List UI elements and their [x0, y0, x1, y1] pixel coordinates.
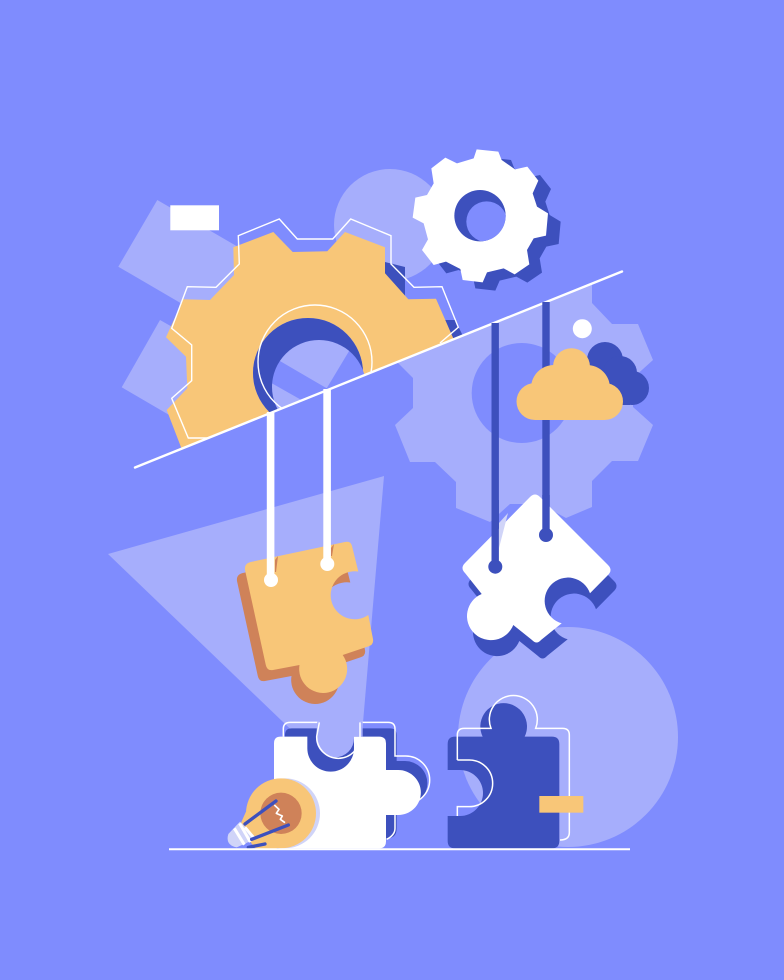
- gear body: [166, 232, 454, 449]
- big yellow gear: [166, 219, 463, 449]
- piece body: [462, 494, 610, 642]
- pale background gear: [395, 270, 653, 522]
- light bulb: [228, 778, 320, 850]
- gear white outline: [172, 219, 458, 438]
- socket opening: [316, 722, 363, 757]
- tilted beam line: [135, 272, 622, 468]
- gear hole: [454, 190, 506, 241]
- bulb glass: [246, 778, 316, 848]
- base stripes: [234, 823, 255, 845]
- piece shadow: [468, 510, 616, 658]
- outline behind piece: [283, 722, 430, 839]
- illustration: [108, 149, 678, 850]
- string shadows: [275, 556, 278, 572]
- gear shadow: [425, 158, 561, 291]
- piece body: [274, 737, 421, 848]
- filament: [274, 805, 285, 823]
- large pale circle: [458, 627, 678, 847]
- gear hole opening: [466, 201, 507, 242]
- dark cloud: [587, 342, 649, 405]
- piece shadow: [285, 728, 427, 838]
- gear hole crescent: [253, 318, 363, 412]
- dark strings on piece: [488, 495, 553, 574]
- pale triangle: [108, 476, 384, 793]
- piece shadow: [237, 553, 365, 704]
- string shadow: [499, 513, 508, 548]
- bulb base: [228, 822, 257, 847]
- gear body: [413, 149, 548, 282]
- pale rotated rectangles: [118, 200, 354, 414]
- hanging yellow puzzle piece: [237, 542, 373, 704]
- yellow cloud: [516, 348, 623, 420]
- white strings with ends: [264, 389, 334, 587]
- ground line: [169, 848, 630, 850]
- gear shadow pieces: [385, 262, 463, 342]
- white label rectangle: [170, 205, 219, 230]
- hanging white puzzle piece: [462, 494, 616, 658]
- piece body: [245, 542, 373, 693]
- small white gear: [413, 149, 561, 291]
- bulb core: [260, 793, 302, 834]
- yellow label rectangle: [539, 796, 583, 813]
- filament supports: [245, 801, 288, 847]
- white dot: [573, 319, 592, 338]
- bulb neck: [241, 812, 277, 848]
- pale circle behind small gear: [334, 169, 446, 281]
- bottom blue puzzle piece: [448, 696, 583, 848]
- piece outline: [457, 696, 569, 840]
- bottom white puzzle piece: [274, 722, 430, 848]
- bulb halo: [284, 778, 320, 848]
- piece body: [448, 703, 559, 848]
- dark hanging strings: [492, 302, 550, 566]
- socket outline: [317, 722, 360, 758]
